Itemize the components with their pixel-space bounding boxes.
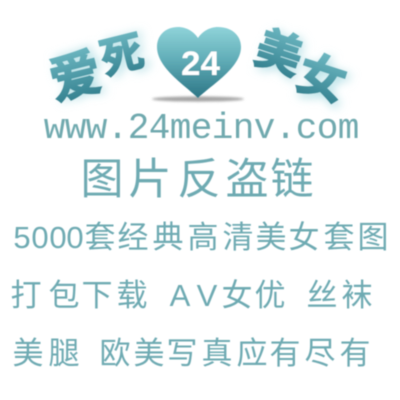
logo right text: 美女: 女 — [292, 48, 357, 116]
logo left text: 爱死: 死 — [101, 28, 154, 85]
icon: heart with 24 — [157, 27, 241, 98]
logo left text: 爱死 — [44, 27, 154, 111]
logo left text: 爱死: 死 — [96, 27, 149, 84]
text line 1: 5000套经典高清美女套图 — [13, 220, 388, 255]
logo left text: 爱死: 爱 — [44, 43, 107, 110]
logo left text: 爱死: 爱 — [47, 42, 112, 111]
logo right text: 美女: 美 — [252, 24, 312, 88]
logo right text: 美女: 女 — [291, 47, 353, 112]
heart shadow — [152, 96, 244, 102]
logo right text: 美女 — [249, 21, 357, 116]
heading: 图片反盗链: 图片反盗链 — [80, 156, 314, 204]
website url: www.24meinv.com — [44, 108, 359, 149]
text line 2: 打包下载AV女优丝袜 — [10, 278, 372, 313]
text line 3: 美腿欧美写真应有尽有 — [12, 336, 370, 371]
icon: heart with 24: 24 — [181, 45, 220, 83]
logo right text: 美女: 美 — [249, 21, 309, 85]
